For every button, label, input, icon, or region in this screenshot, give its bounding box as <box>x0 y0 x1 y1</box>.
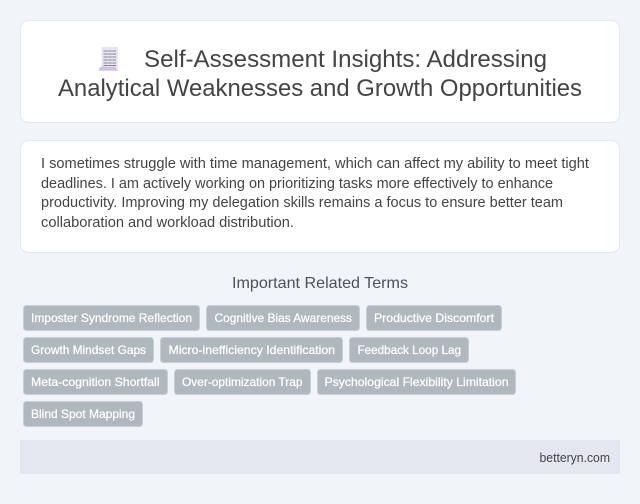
chip: Blind Spot Mapping: Blind Spot Mapping <box>31 407 135 421</box>
footer site name: betteryn.com <box>540 451 610 465</box>
description text: collaboration and workload distribution. <box>41 215 294 231</box>
heading: important related terms: Important Related Terms <box>232 275 408 292</box>
chip: Feedback Loop Lag <box>350 338 468 362</box>
footer bar <box>20 440 620 474</box>
chip: Meta-cognition Shortfall <box>24 370 168 394</box>
chip: Imposter Syndrome Reflection: Imposter Syndrome Reflection <box>31 311 192 325</box>
panel: related term chips <box>24 306 516 426</box>
chip: Micro-inefficiency Identification <box>160 338 342 362</box>
chip: Growth Mindset Gaps: Growth Mindset Gaps <box>31 343 146 357</box>
chip: Cognitive Bias Awareness <box>206 306 360 330</box>
description text: I sometimes struggle with time management, which can affect my ability to meet tight <box>41 156 589 172</box>
chip: Cognitive Bias Awareness: Cognitive Bias Awareness <box>214 311 352 325</box>
chip: Imposter Syndrome Reflection <box>24 306 200 330</box>
chip: Productive Discomfort <box>366 306 502 330</box>
chip: Psychological Flexibility Limitation: Psychological Flexibility Limitation <box>324 375 508 389</box>
panel: description card <box>20 140 620 252</box>
icon: scroll document <box>99 47 118 71</box>
description text: deadlines. I am actively working on prioritizing tasks more effectively to enhance <box>41 176 553 192</box>
chip: Psychological Flexibility Limitation <box>318 370 516 394</box>
chip: Micro-inefficiency Identification: Micro-inefficiency Identification <box>168 343 335 357</box>
chip: Growth Mindset Gaps <box>24 338 154 362</box>
chip: Meta-cognition Shortfall: Meta-cognition Shortfall <box>31 375 160 389</box>
title text <box>58 46 582 102</box>
panel: title card <box>20 20 620 122</box>
chip: Over-optimization Trap <box>174 370 310 394</box>
title text: Analytical Weaknesses and Growth Opportunities <box>58 75 582 102</box>
title text: Self-Assessment Insights: Addressing <box>144 46 547 73</box>
chip: Productive Discomfort: Productive Discomfort <box>374 311 495 325</box>
chip: Feedback Loop Lag: Feedback Loop Lag <box>358 343 461 357</box>
chip: Over-optimization Trap: Over-optimization Trap <box>182 375 303 389</box>
chip: Blind Spot Mapping <box>24 402 142 426</box>
description text <box>41 156 589 231</box>
description text: productivity. Improving my delegation skills remains a focus to ensure better team <box>41 195 563 211</box>
